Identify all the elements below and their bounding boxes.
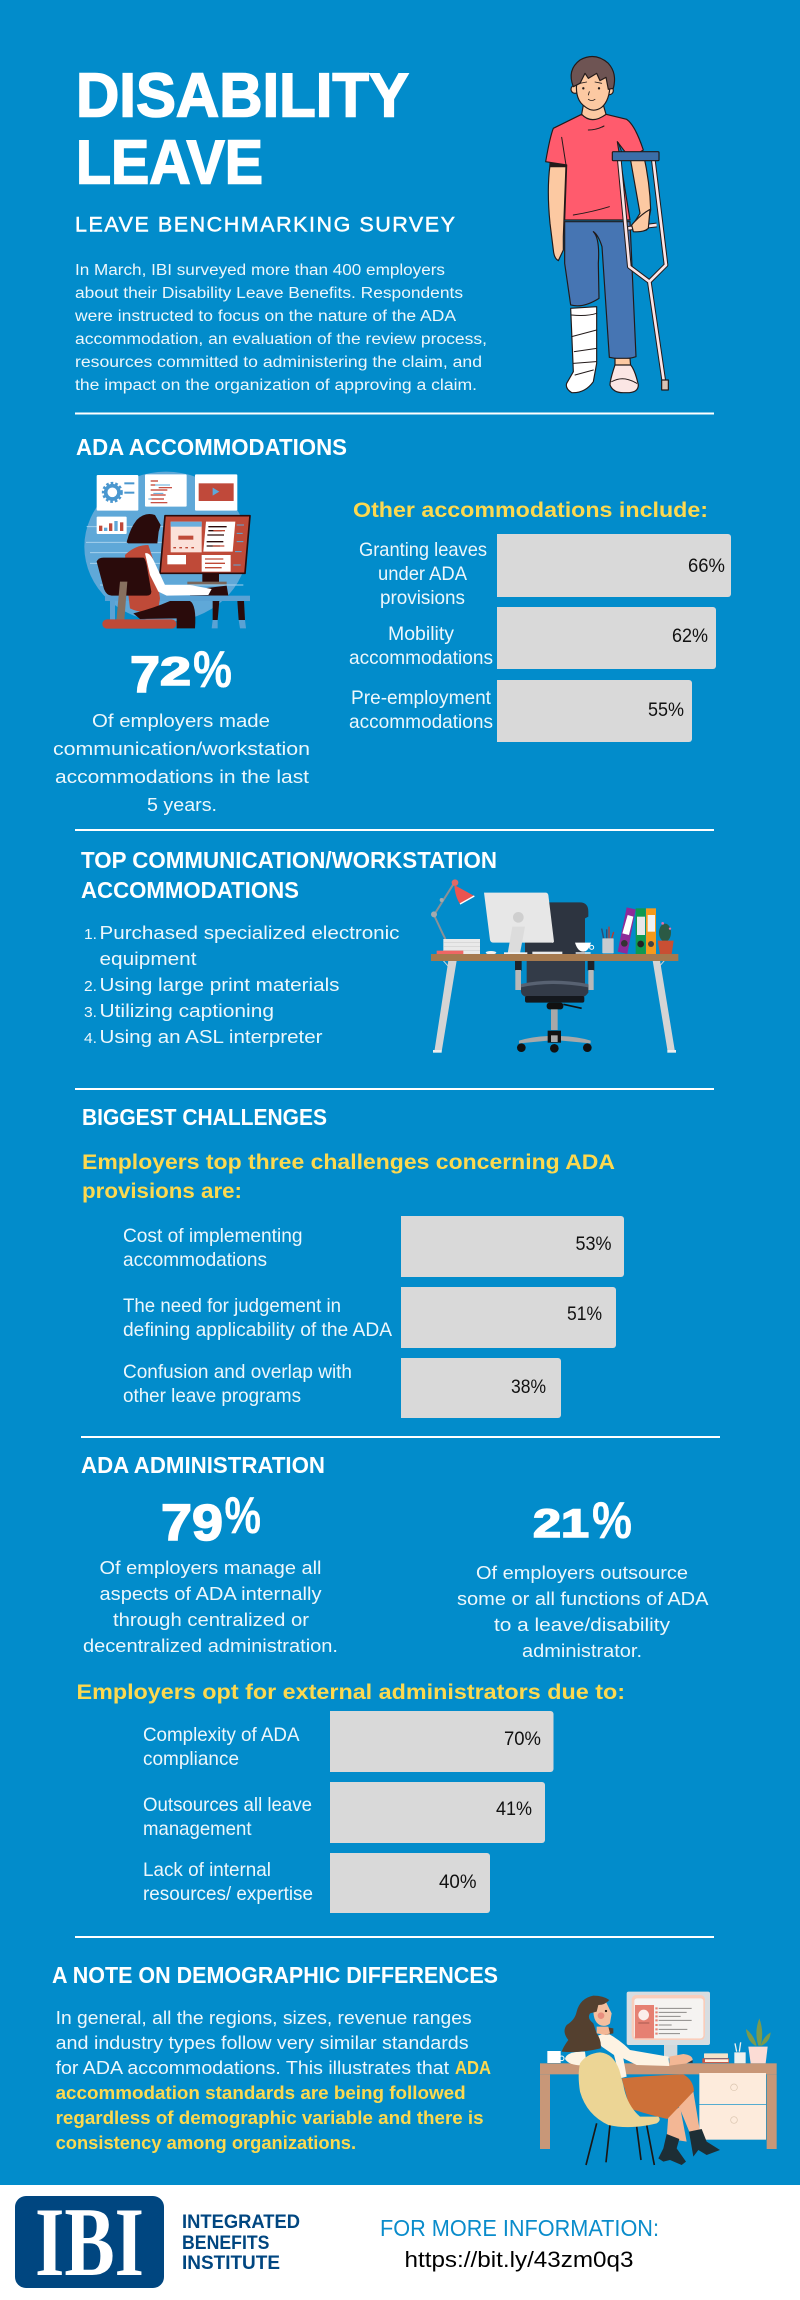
text: internal administration description: through centralized or — [113, 1609, 309, 1630]
stat: 72 percent: 7 — [130, 646, 160, 703]
bar: cost 53%: Cost of implementing — [123, 1225, 302, 1247]
heading: demographic differences: A NOTE ON DEMOGRAPHIC DIFFERENCES — [52, 1962, 498, 1988]
bar: judgement 51%: defining applicability of the ADA — [123, 1319, 392, 1341]
subheading: external administrators: Employers opt for external administrators due to: — [76, 1681, 625, 1704]
bar: complexity 70% — [143, 1711, 554, 1772]
bar: granting leaves 66%: 66% — [688, 556, 725, 577]
subheading: top three challenges: Employers top three challenges concerning ADA — [82, 1151, 615, 1174]
bar: outsources 41%: management — [143, 1818, 252, 1840]
numbered list: 3. — [84, 1004, 97, 1021]
bar: cost 53%: accommodations — [123, 1249, 267, 1271]
stat: 79 percent: % — [224, 1487, 261, 1545]
text: demographic note: ADA — [455, 2057, 491, 2078]
heading: ADA administration: ADA ADMINISTRATION — [81, 1452, 325, 1478]
text: more information link — [380, 2215, 659, 2272]
stat: 72 percent — [130, 641, 232, 703]
text: outsourcing description: some or all functions of ADA — [457, 1588, 709, 1609]
logo: IBI: INSTITUTE — [182, 2252, 280, 2274]
logo: IBI: IBI — [35, 2188, 144, 2297]
stat: 72 percent: 2 — [160, 650, 191, 694]
text: internal administration description — [83, 1557, 338, 1656]
subheading: top three challenges: provisions are: — [82, 1180, 242, 1203]
bar: mobility 62%: Mobility — [388, 623, 454, 645]
heading: top communication accommodations: TOP COMMUNICATION/WORKSTATION — [81, 847, 497, 873]
stat: 79 percent: 79 — [161, 1494, 223, 1551]
stat: 21 percent: 21 — [533, 1502, 589, 1546]
logo: IBI: INTEGRATED — [182, 2211, 300, 2233]
bar: outsources 41%: Outsources all leave — [143, 1794, 312, 1816]
bar: complexity 70%: compliance — [143, 1748, 239, 1770]
text: communication accommodations description: communication/workstation — [53, 738, 310, 759]
bar: mobility 62%: 62% — [672, 626, 708, 647]
text: communication accommodations description: Of employers made — [92, 710, 270, 731]
text: more information link: FOR MORE INFORMATION: — [380, 2215, 659, 2241]
icon: man with bandaged leg on crutches — [546, 57, 668, 393]
text: communication accommodations description: 5 years. — [147, 794, 217, 815]
text: demographic note: for ADA accommodations. This illustrates that — [56, 2057, 449, 2078]
text: outsourcing description: administrator. — [522, 1640, 642, 1661]
numbered list: 2. — [84, 978, 97, 995]
title: LEAVE — [76, 128, 263, 198]
numbered list — [84, 922, 400, 1047]
bar: outsources 41%: 41% — [496, 1799, 532, 1820]
bar: lack of resources 40%: 40% — [439, 1872, 477, 1893]
intro paragraph: were instructed to focus on the nature of the ADA — [74, 308, 457, 325]
bar: mobility 62%: accommodations — [349, 647, 493, 669]
heading: biggest challenges: BIGGEST CHALLENGES — [82, 1104, 327, 1130]
heading: top communication accommodations: ACCOMMODATIONS — [81, 877, 299, 903]
bar: judgement 51% — [123, 1287, 616, 1348]
bar: pre-employment 55%: Pre-employment — [351, 687, 492, 709]
bar chart: external administrators — [143, 1711, 554, 1913]
subheading: top three challenges — [82, 1151, 615, 1203]
bar: confusion 38%: 38% — [511, 1377, 546, 1398]
numbered list: Utilizing captioning — [100, 1000, 274, 1021]
stat: 21 percent: % — [592, 1492, 632, 1550]
text: more information link: https://bit.ly/43zm0q3 — [404, 2247, 634, 2272]
text: internal administration description: decentralized administration. — [83, 1635, 338, 1656]
text: outsourcing description: to a leave/disability — [494, 1614, 671, 1635]
icon: office desk with computer — [431, 879, 678, 1053]
logo: IBI: BENEFITS — [182, 2232, 270, 2254]
intro paragraph — [74, 262, 487, 394]
heading: top communication accommodations — [81, 847, 497, 903]
bar: granting leaves 66%: under ADA — [378, 563, 467, 585]
numbered list: Purchased specialized electronic — [100, 922, 400, 943]
heading: other accommodations: Other accommodations include: — [353, 499, 708, 522]
bar: complexity 70%: 70% — [504, 1729, 541, 1750]
text: outsourcing description — [457, 1562, 709, 1661]
logo: IBI — [15, 2188, 300, 2297]
text: demographic note: accommodation standards are being followed — [56, 2082, 466, 2103]
bar: cost 53% — [123, 1216, 624, 1277]
text: demographic note — [56, 2007, 491, 2153]
text: demographic note: and industry types follow very similar standards — [56, 2032, 469, 2053]
bar: lack of resources 40%: Lack of internal — [143, 1859, 271, 1881]
bar: confusion 38%: Confusion and overlap with — [123, 1361, 352, 1383]
text: internal administration description: aspects of ADA internally — [100, 1583, 322, 1604]
intro paragraph: about their Disability Leave Benefits. Respondents — [75, 285, 463, 302]
title — [76, 62, 409, 198]
text: internal administration description: Of employers manage all — [100, 1557, 322, 1578]
bar: granting leaves 66% — [359, 534, 731, 609]
icon: woman at computer workstation — [84, 472, 250, 629]
text: demographic note: consistency among organizations. — [56, 2132, 356, 2153]
numbered list: 1. — [84, 926, 97, 943]
intro paragraph: resources committed to administering the claim, and — [75, 354, 482, 371]
bar: judgement 51%: The need for judgement in — [123, 1295, 341, 1317]
numbered list: Using large print materials — [100, 974, 340, 995]
bar chart: biggest challenges — [123, 1216, 624, 1418]
intro paragraph: accommodation, an evaluation of the review process, — [75, 331, 487, 348]
bar: confusion 38%: other leave programs — [123, 1385, 301, 1407]
stat: 79 percent — [161, 1487, 261, 1551]
stat: 72 percent: % — [193, 641, 232, 699]
bar: outsources 41% — [143, 1782, 545, 1843]
text: communication accommodations description: accommodations in the last — [55, 766, 309, 787]
numbered list: equipment — [100, 948, 196, 969]
heading: ADA accommodations: ADA ACCOMMODATIONS — [76, 434, 347, 460]
bar: pre-employment 55% — [349, 680, 692, 742]
bar: pre-employment 55%: accommodations — [349, 711, 493, 733]
bar: confusion 38% — [123, 1358, 561, 1418]
text: outsourcing description: Of employers outsource — [476, 1562, 688, 1583]
bar: pre-employment 55%: 55% — [648, 700, 684, 721]
intro paragraph: the impact on the organization of approving a claim. — [75, 377, 477, 394]
numbered list: Using an ASL interpreter — [100, 1026, 322, 1047]
bar: complexity 70%: Complexity of ADA — [143, 1724, 300, 1746]
bar: lack of resources 40%: resources/ expertise — [143, 1883, 313, 1905]
icon: woman working at desk — [540, 1992, 777, 2165]
intro paragraph: In March, IBI surveyed more than 400 employers — [75, 262, 445, 279]
bar: judgement 51%: 51% — [567, 1304, 602, 1325]
text: demographic note: In general, all the regions, sizes, revenue ranges — [56, 2007, 472, 2028]
bar: mobility 62% — [349, 607, 716, 669]
bar: cost 53%: 53% — [576, 1234, 612, 1255]
text: communication accommodations description — [53, 710, 310, 815]
bar: granting leaves 66%: Granting leaves — [359, 539, 487, 561]
stat: 21 percent — [533, 1492, 632, 1550]
title: DISABILITY — [76, 62, 409, 130]
bar: lack of resources 40% — [143, 1853, 490, 1913]
subtitle: LEAVE BENCHMARKING SURVEY — [75, 212, 455, 236]
text: demographic note: regardless of demographic variable and there is — [56, 2107, 484, 2128]
bar chart: other accommodations — [349, 534, 731, 742]
numbered list: 4. — [84, 1030, 97, 1047]
bar: granting leaves 66%: provisions — [380, 587, 465, 609]
